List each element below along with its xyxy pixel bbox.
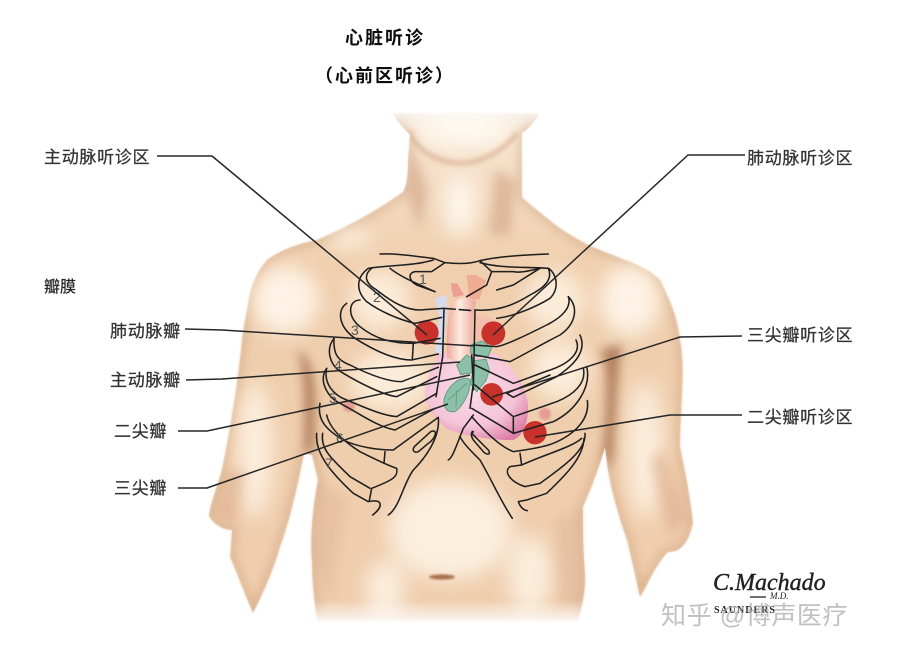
label: pulmonary valve: 肺动脉瓣 xyxy=(110,322,181,341)
heart body xyxy=(425,350,528,440)
ribs: left side xyxy=(317,300,440,515)
leader: aortic area xyxy=(157,156,427,335)
leader: mitral area xyxy=(535,415,742,437)
label: pulmonary area: 肺动脉听诊区 xyxy=(747,149,853,168)
outline shading xyxy=(209,113,693,622)
zone: pulmonary xyxy=(481,321,505,345)
label: valves heading: 瓣膜 xyxy=(44,278,76,296)
title: （心前区听诊） xyxy=(315,65,455,86)
rib numbers: 1 xyxy=(419,271,427,287)
zone: mitral xyxy=(523,421,547,444)
title xyxy=(315,27,455,86)
clavicles and upper ribs xyxy=(359,254,556,397)
watermark: 知乎 @博声医疗 xyxy=(661,602,848,630)
title: 心脏听诊 xyxy=(345,27,425,48)
artist signature xyxy=(713,570,826,616)
ribs: right side xyxy=(448,297,588,518)
rib numbers: 7 xyxy=(325,455,333,471)
chest highlights xyxy=(237,112,663,620)
labels xyxy=(44,148,853,498)
zone: tricuspid xyxy=(480,383,503,406)
fade at waist xyxy=(300,600,600,624)
rib numbers: 2 xyxy=(373,289,381,305)
label: aortic area: 主动脉听诊区 xyxy=(44,148,150,167)
rib numbers: 3 xyxy=(351,322,359,338)
label: aortic valve: 主动脉瓣 xyxy=(110,371,181,390)
label: mitral area: 二尖瓣听诊区 xyxy=(747,408,853,427)
rib numbers xyxy=(325,271,427,471)
artist signature: SAUNDERS xyxy=(714,605,776,616)
leader lines xyxy=(157,155,745,488)
heart xyxy=(359,254,556,444)
valves xyxy=(444,341,492,412)
illustration: male torso xyxy=(209,108,693,624)
artist signature: C.Machado xyxy=(713,570,826,596)
great vessels xyxy=(435,275,504,363)
leader: pulmonary area xyxy=(493,155,745,335)
zone: aortic xyxy=(415,321,439,345)
rib numbers: 5 xyxy=(329,390,337,406)
auscultation zones xyxy=(415,321,547,444)
leader: tricuspid valve xyxy=(178,404,448,488)
fade at head xyxy=(385,108,545,130)
label: tricuspid valve: 三尖瓣 xyxy=(114,479,167,498)
label: tricuspid area: 三尖瓣听诊区 xyxy=(747,326,853,345)
chin shadow xyxy=(408,132,517,163)
muscle shadows xyxy=(215,150,688,610)
rib numbers: 4 xyxy=(334,357,342,373)
rib numbers: 6 xyxy=(336,430,344,446)
label: mitral valve: 二尖瓣 xyxy=(114,422,167,441)
nipples xyxy=(343,400,551,420)
artist signature: M.D. xyxy=(769,591,788,601)
leader: pulmonary valve xyxy=(185,329,475,346)
leader: aortic valve xyxy=(186,362,460,380)
navel xyxy=(429,574,455,580)
leader: mitral valve xyxy=(178,375,470,431)
leader: tricuspid area xyxy=(492,336,742,397)
